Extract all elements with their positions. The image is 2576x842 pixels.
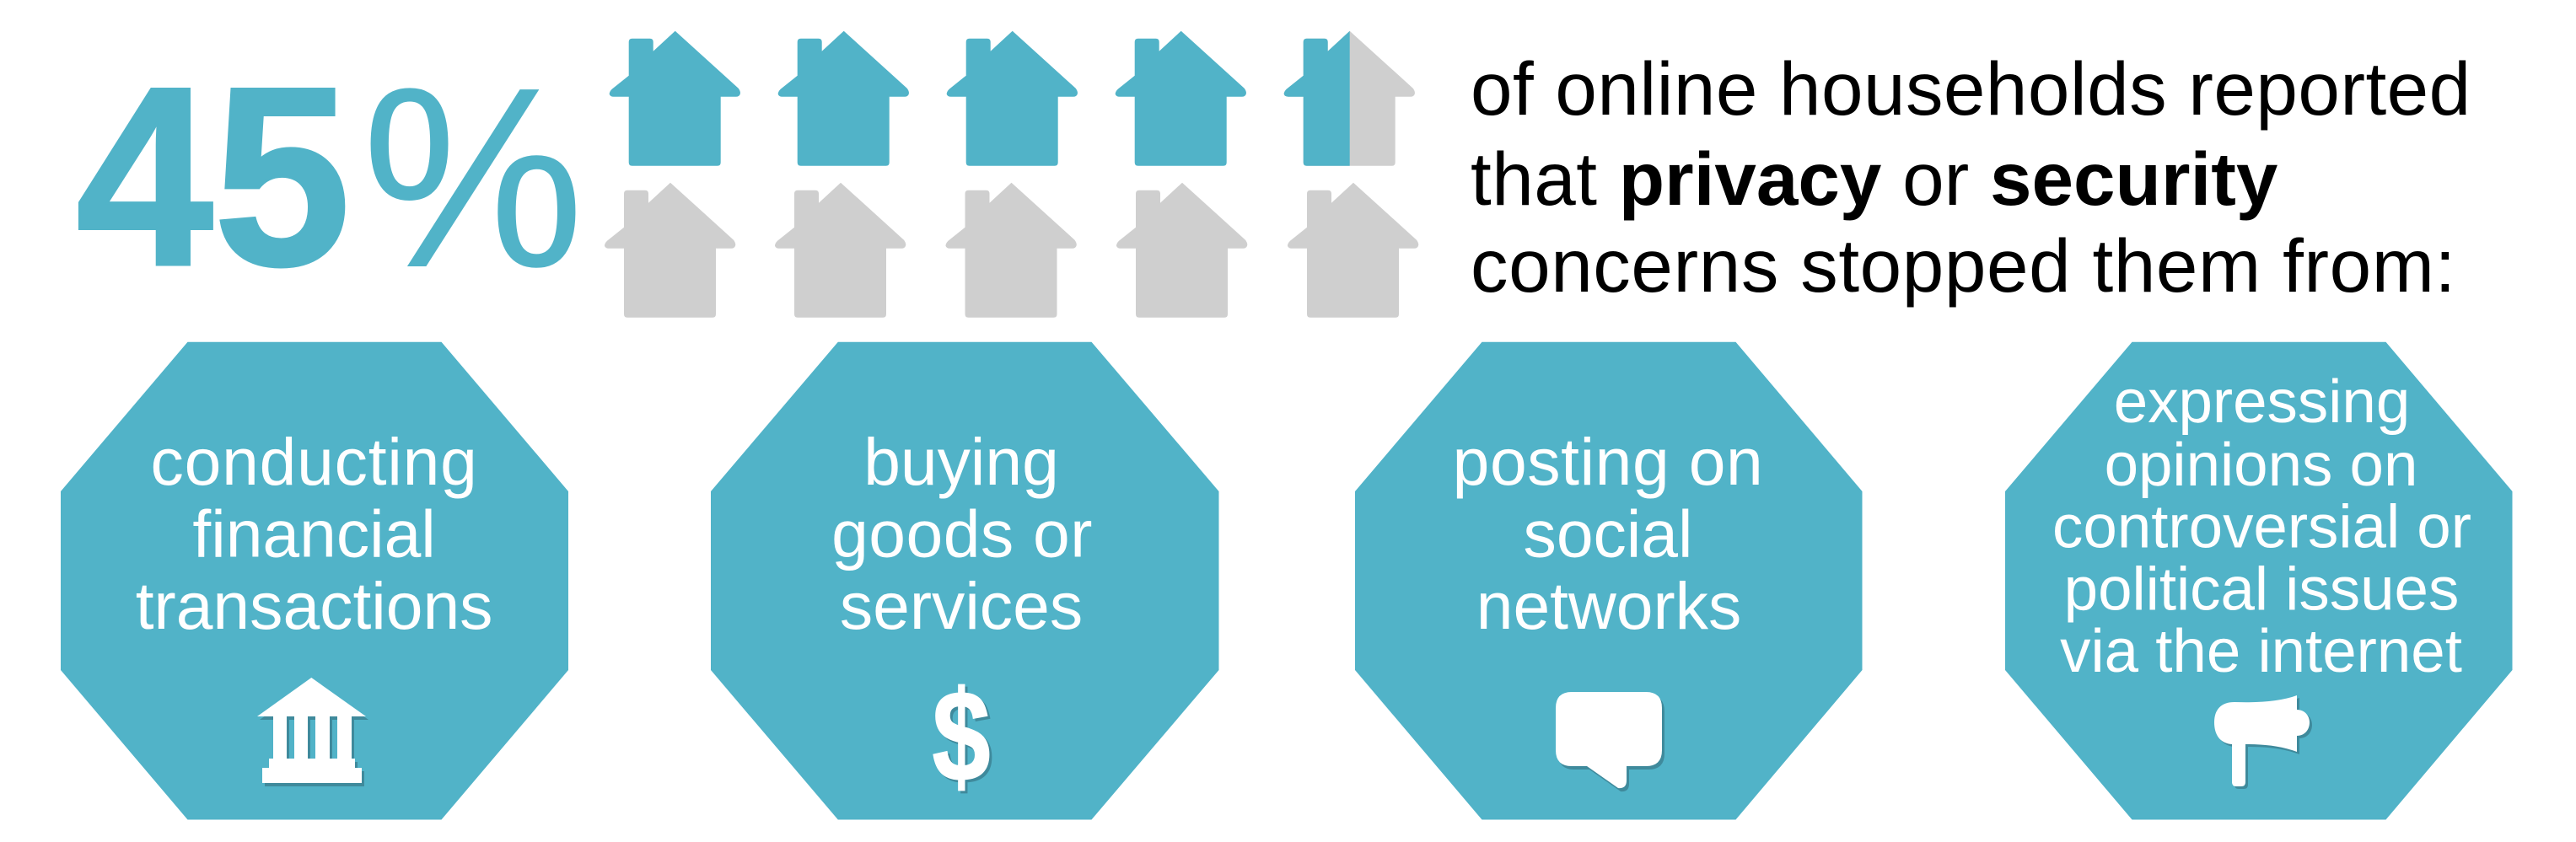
headline text xyxy=(1471,46,2471,308)
big statistic: 45%: 45 xyxy=(76,35,351,319)
icon: dollar sign: $ xyxy=(935,667,992,811)
label xyxy=(1453,425,1763,643)
house pictogram: 10 houses, 4.5 filled xyxy=(605,31,1418,318)
label xyxy=(136,425,492,643)
bottom row of houses xyxy=(605,183,1418,318)
big statistic: 45% xyxy=(76,34,584,321)
icon: dollar sign: $ xyxy=(933,664,990,808)
octagon xyxy=(711,342,1219,819)
label: expressing xyxy=(2114,367,2410,436)
label: goods or xyxy=(831,497,1093,571)
label: networks xyxy=(1476,569,1741,643)
label: conducting xyxy=(151,425,478,499)
label: social xyxy=(1524,497,1692,571)
big statistic: 45%: % xyxy=(362,34,584,321)
octagon xyxy=(61,342,568,819)
icon: bank xyxy=(257,678,368,786)
label xyxy=(831,425,1093,643)
headline text: concerns stopped them from: xyxy=(1471,223,2456,308)
icon: speech bubble xyxy=(1556,692,1664,791)
top row of houses xyxy=(610,31,1415,166)
label: via the internet xyxy=(2060,617,2462,685)
headline text: that privacy or security xyxy=(1471,137,2278,221)
octagon xyxy=(1355,342,1862,819)
panel: buying goods or services xyxy=(711,342,1219,819)
headline text: of online households reported xyxy=(1471,46,2471,131)
label: opinions on xyxy=(2105,431,2417,499)
label: political issues xyxy=(2064,555,2459,624)
label: transactions xyxy=(136,569,492,643)
label: financial xyxy=(192,497,436,571)
octagon xyxy=(2005,342,2513,819)
panel: conducting financial transactions xyxy=(61,342,568,819)
label: controversial or xyxy=(2052,493,2471,561)
label: posting on xyxy=(1453,425,1763,499)
panel: posting on social networks xyxy=(1355,342,1862,819)
label xyxy=(2052,367,2471,685)
label: services xyxy=(840,569,1083,643)
icon: megaphone xyxy=(2214,695,2312,789)
label: buying xyxy=(863,425,1059,499)
panel: expressing opinions xyxy=(2005,342,2513,819)
